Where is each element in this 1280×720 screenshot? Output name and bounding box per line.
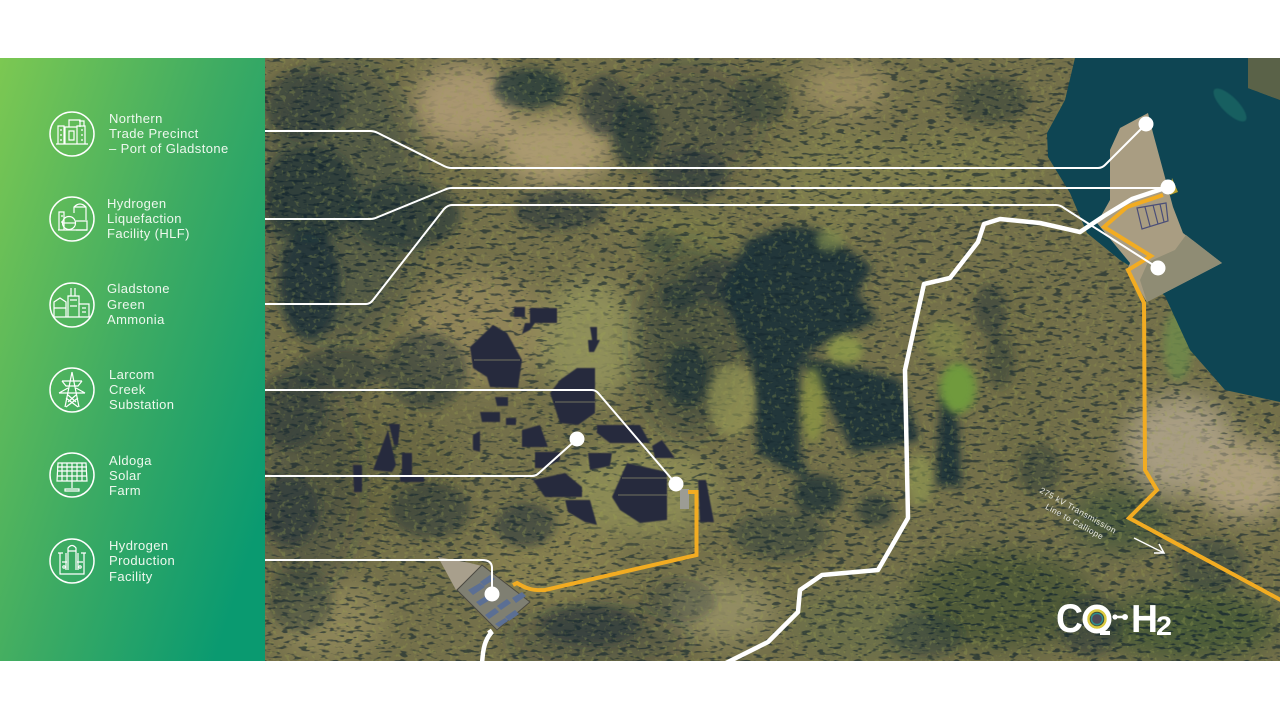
marker: Gladstone Green Ammonia <box>1150 260 1166 276</box>
label: Larcom Creek Substation: Larcom <box>109 367 155 382</box>
terrain base <box>265 58 1280 661</box>
marker: Aldoga Solar Farm <box>570 432 584 446</box>
label: Gladstone Green Ammonia: Gladstone <box>107 281 170 296</box>
broad forest darkening <box>260 60 760 670</box>
logo: CQ-H2 <box>1056 597 1172 641</box>
logo: CQ-H2: H <box>1131 598 1158 641</box>
label: Gladstone Green Ammonia: Ammonia <box>107 312 165 327</box>
central mountain <box>720 225 920 482</box>
label: Aldoga Solar Farm: Farm <box>109 483 141 498</box>
marker: Hydrogen Liquefaction Facility <box>1160 180 1176 194</box>
terrain tone patches <box>275 62 1280 661</box>
logo: CQ-H2: C <box>1056 597 1083 641</box>
label: Aldoga Solar Farm: Solar <box>109 468 142 483</box>
ship at berth <box>1170 178 1178 195</box>
logo: CQ-H2: 2 <box>1156 611 1172 641</box>
leader: Hydrogen Production Facility <box>265 560 492 594</box>
transmission label: Line to Calliope <box>1044 501 1105 542</box>
satellite map <box>255 58 1280 670</box>
label: Hydrogen Production Facility: Production <box>109 553 175 568</box>
logo: Q ring <box>1085 607 1110 633</box>
icon: liquefaction facility <box>50 197 94 241</box>
tree texture <box>265 58 1280 661</box>
icon: hydrogen production <box>50 539 94 583</box>
label: Hydrogen Production Facility: Facility <box>109 569 153 584</box>
transmission line, wharf to Calliope <box>1104 195 1280 605</box>
leader: Larcom Creek Substation <box>265 390 676 484</box>
leader: Hydrogen Liquefaction Facility <box>265 188 1168 219</box>
label: Hydrogen Liquefaction Facility: Hydrogen <box>107 196 167 211</box>
icon: green ammonia plant <box>50 283 94 327</box>
logo: connector <box>1113 616 1127 618</box>
solar array row gaps <box>474 360 667 495</box>
callout leader lines <box>265 124 1168 594</box>
label: Larcom Creek Substation: Creek <box>109 382 146 397</box>
bright vegetation patches <box>708 229 1192 506</box>
white pipeline, main route <box>716 187 1168 668</box>
white pipeline, plant stub <box>482 630 491 664</box>
icon: solar panel <box>50 453 94 497</box>
top-right headland <box>1248 58 1280 100</box>
callout markers <box>484 116 1176 602</box>
leader: Aldoga Solar Farm <box>265 439 577 476</box>
marker: Larcom Creek Substation <box>668 476 684 492</box>
direction arrow <box>1134 538 1164 553</box>
hydrogen production site <box>457 565 530 630</box>
icon: trade precinct <box>50 112 94 156</box>
transmission label: 275 kV Transmission <box>1038 485 1118 536</box>
label: Aldoga Solar Farm: Aldoga <box>109 453 152 468</box>
label: Northern Trade Precinct: Trade Precinct <box>109 126 199 141</box>
leader: Northern Trade Precinct <box>265 124 1146 168</box>
forest shading patches <box>255 68 1246 657</box>
sidebar panel <box>0 58 265 661</box>
label: Hydrogen Production Facility: Hydrogen <box>109 538 169 553</box>
reclaimed wharf land <box>1097 113 1222 302</box>
hydrogen plant clearing <box>438 557 482 590</box>
solar farm arrays <box>353 307 714 525</box>
marker: Northern Trade Precinct <box>1138 116 1154 132</box>
label: Northern Trade Precinct: – Port of Gladstone <box>109 141 229 156</box>
label: Gladstone Green Ammonia: Green <box>107 297 145 312</box>
275 kV transmission line, solar to plant <box>513 492 696 590</box>
marker: Hydrogen Production Facility <box>484 586 500 602</box>
terminal equipment <box>1137 203 1168 229</box>
label: Northern Trade Precinct: Northern <box>109 111 163 126</box>
leader: Gladstone Green Ammonia <box>265 205 1158 304</box>
icon: pylon <box>50 368 94 412</box>
substation pad <box>680 489 689 509</box>
label: Hydrogen Liquefaction Facility: Liquefaction <box>107 211 182 226</box>
legend items <box>50 111 229 584</box>
label: Larcom Creek Substation: Substation <box>109 397 174 412</box>
water: The Narrows <box>1047 58 1280 402</box>
olive highlight texture <box>265 58 1280 661</box>
label: Hydrogen Liquefaction Facility: Facility (HLF) <box>107 226 190 241</box>
